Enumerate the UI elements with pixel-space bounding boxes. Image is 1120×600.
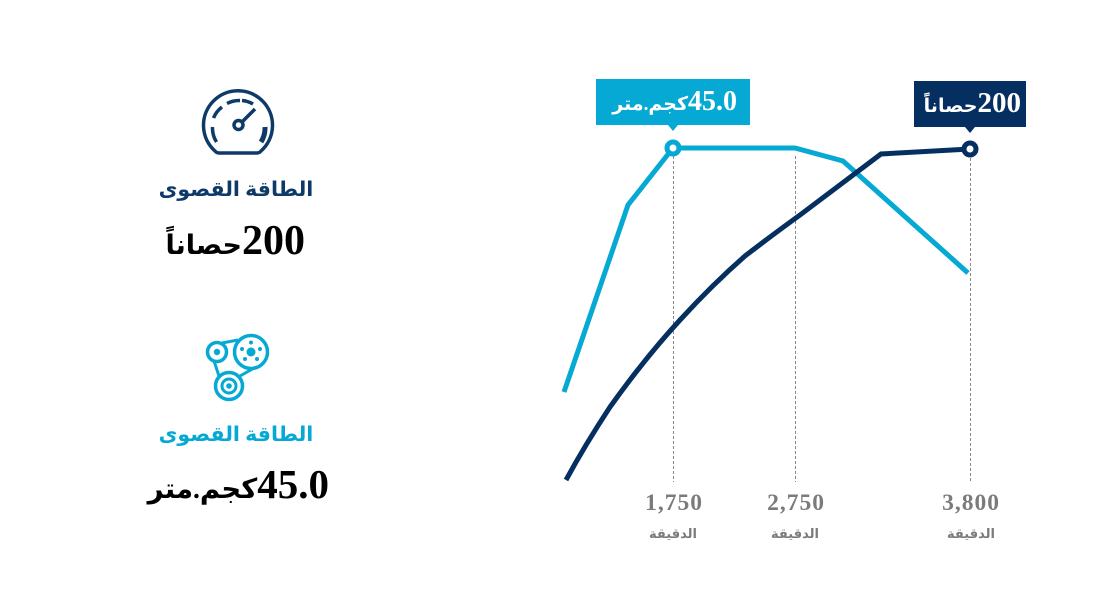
axis label: 1,750 rpm: الدقيقة — [649, 526, 697, 541]
axis label: 2,750 rpm: 2,750 — [767, 490, 825, 516]
callout: torque: 45.0كجم.متر — [611, 86, 737, 117]
axis label: 1,750 rpm — [645, 490, 703, 541]
axis label: 3,800 rpm: الدقيقة — [947, 526, 995, 541]
callout: power — [914, 81, 1026, 133]
line: power — [566, 149, 970, 480]
callout: torque — [596, 79, 750, 131]
heading: maximum power: الطاقة القصوى — [159, 179, 313, 201]
axis label: 3,800 rpm: 3,800 — [942, 490, 1000, 516]
value: 200 horsepower: 200حصاناً — [165, 218, 305, 264]
axis label: 2,750 rpm — [767, 490, 825, 541]
dashed guide lines — [674, 156, 970, 482]
value: 45.0 kg.m: 45.0كجم.متر — [146, 461, 329, 507]
axis label: 1,750 rpm: 1,750 — [645, 490, 703, 516]
line: torque — [564, 148, 968, 392]
marker: torque peak — [667, 142, 679, 154]
icon: belt pulleys — [208, 336, 268, 400]
callout: power: 200حصاناً — [924, 87, 1021, 119]
panel: maximum power — [159, 91, 313, 264]
axis label: 3,800 rpm — [942, 490, 1000, 541]
marker: power peak — [964, 143, 976, 155]
icon: speedometer — [204, 91, 272, 153]
heading: maximum power: الطاقة القصوى — [159, 424, 313, 446]
panel: maximum torque — [146, 336, 329, 507]
axis label: 2,750 rpm: الدقيقة — [771, 526, 819, 541]
chart: power and torque curves — [564, 79, 1026, 541]
